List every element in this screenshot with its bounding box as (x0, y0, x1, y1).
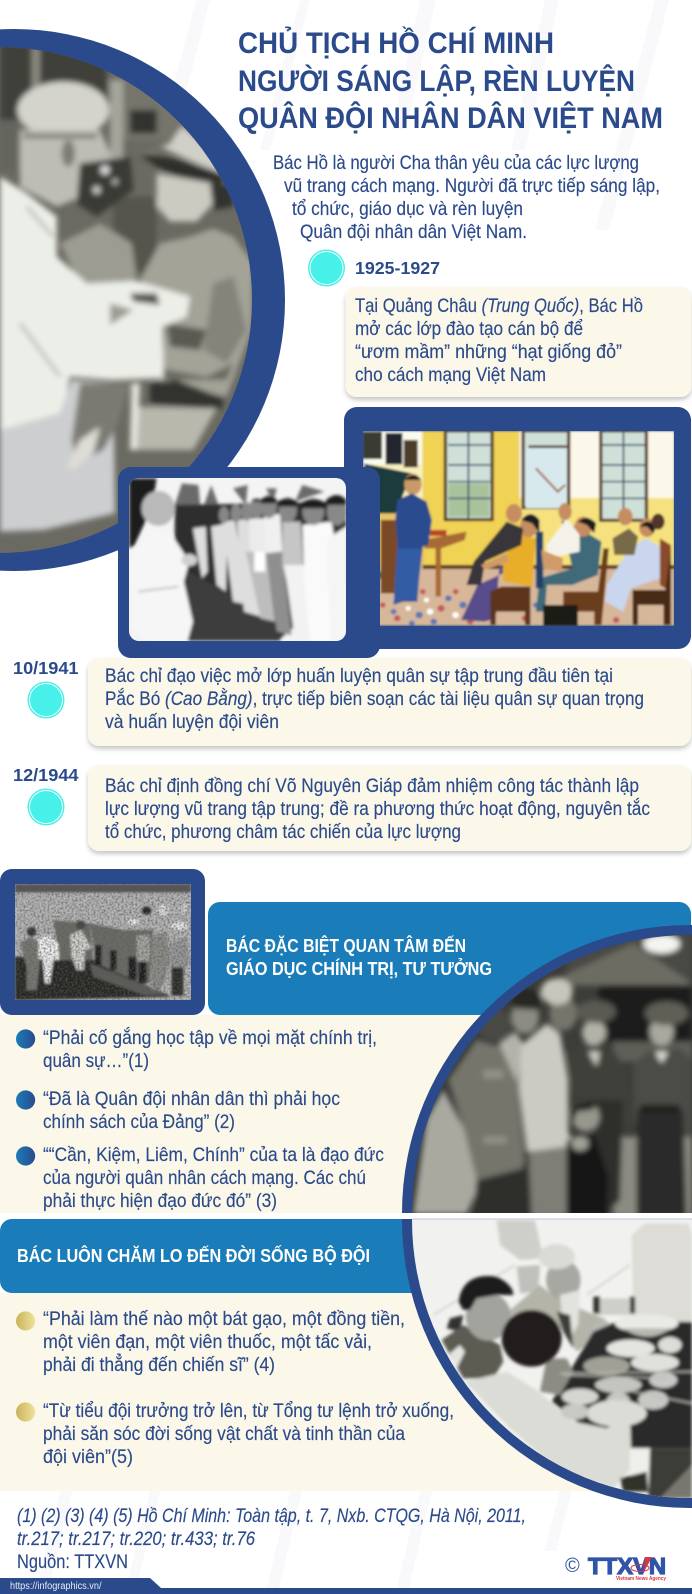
card: 1925-1927: Tại Quảng Châu (Trung Quốc), Bác Hồ (355, 295, 643, 317)
card: 10/1941: Bác chỉ đạo việc mở lớp huấn luyện quân sự tập trung đầu tiên tại (105, 665, 613, 687)
bullet list: political education: phải thực hiện đạo đức đó” (3) (43, 1190, 277, 1212)
bottom bar with url tab: https://infographics.vn/ (10, 1581, 102, 1592)
header: political education: BÁC ĐẶC BIỆT QUAN TÂM ĐẾN (226, 935, 466, 956)
card: 12/1944: Bác chỉ định đồng chí Võ Nguyên Giáp đảm nhiệm công tác thành lập (105, 775, 639, 797)
bullet list: soldiers' life: “Phải làm thế nào một bát gạo, một đồng tiền, (43, 1308, 405, 1330)
bullet list: political education: chính sách của Đảng” (2) (43, 1111, 235, 1133)
timeline marker 1925-1927: 1925-1927 (355, 258, 440, 278)
cream panel: soldiers' life (0, 1293, 692, 1491)
header: political education: GIÁO DỤC CHÍNH TRỊ, TƯ TƯỞNG (226, 958, 492, 979)
bullet list: soldiers' life: đội viên”(5) (43, 1446, 133, 1468)
footnotes and source: Nguồn: TTXVN (17, 1551, 128, 1573)
card: 1925-1927 (346, 287, 692, 397)
card: 1925-1927: cho cách mạng Việt Nam (355, 364, 546, 386)
intro text: Bác Hồ là người Cha thân yêu của các lực lượng (273, 152, 639, 174)
bullet list: soldiers' life: một viên đạn, một viên thuốc, một tấc vải, (43, 1331, 372, 1353)
intro text: tổ chức, giáo dục và rèn luyện (292, 198, 523, 220)
header: soldiers' life: BÁC LUÔN CHĂM LO ĐẾN ĐỜI SỐNG BỘ ĐỘI (17, 1245, 370, 1266)
timeline marker 1925-1927 (308, 250, 440, 286)
bottom bar with url tab (0, 1578, 692, 1594)
card: 12/1944: tổ chức, phương châm tác chiến của lực lượng (105, 821, 461, 843)
photo frame: crowd review (0, 869, 205, 1015)
title (238, 26, 663, 135)
intro text (273, 152, 660, 243)
bullet list: political education (16, 1026, 384, 1212)
photo frame: Bác Hồ with officers (118, 467, 380, 658)
bullet list: political education: “Phải cố gắng học tập về mọi mặt chính trị, (43, 1026, 377, 1049)
timeline marker 10/1941: 10/1941 (13, 658, 79, 678)
photo frame: painting of classroom (344, 407, 691, 649)
bullet list: political education: quân sự…”(1) (43, 1050, 149, 1072)
title: NGƯỜI SÁNG LẬP, RÈN LUYỆN (238, 64, 635, 98)
photo: Bác Hồ at dining table, in ring (400, 1219, 692, 1509)
card: 1925-1927: “ươm mầm” những “hạt giống đỏ” (355, 341, 622, 363)
bullet list: political education: “Đã là Quân đội nhân dân thì phải học (43, 1088, 340, 1110)
header: soldiers' life (0, 1219, 430, 1293)
bullet list: soldiers' life: “Từ tiểu đội trưởng trở lên, từ Tổng tư lệnh trở xuống, (43, 1400, 454, 1422)
logo: TTXVN: TTXVN (588, 1553, 666, 1579)
bullet list: soldiers' life: phải đi thẳng đến chiến sĩ” (4) (43, 1352, 275, 1376)
bullet list: political education: ““Cần, Kiệm, Liêm, Chính” của ta là đạo đức (43, 1144, 384, 1166)
card: 10/1941: Pắc Bó (Cao Bằng), trực tiếp biên soạn các tài liệu quân sự quan trọng (105, 687, 644, 710)
card: 12/1944 (88, 765, 691, 851)
footnotes and source: tr.217; tr.217; tr.220; tr.433; tr.76 (17, 1528, 255, 1550)
logo: TTXVN (565, 1553, 667, 1582)
header: political education (208, 902, 691, 1015)
cream panel: political education (0, 1015, 692, 1213)
card: 10/1941: và huấn luyện đội viên (105, 711, 279, 733)
bullet list: soldiers' life (16, 1308, 454, 1468)
card: 1925-1927: mở các lớp đào tạo cán bộ để (355, 318, 583, 340)
logo: TTXVN: Vietnam News Agency (616, 1576, 667, 1582)
bullet list: soldiers' life: phải săn sóc đời sống vật chất và tinh thần của (43, 1423, 405, 1445)
photo: Bác Hồ with soldiers and child, in ring (400, 925, 692, 1217)
photo: Bác Hồ pinning badge on soldier, in ring (0, 29, 285, 571)
card: 10/1941 (88, 658, 691, 746)
footnotes and source: (1) (2) (3) (4) (5) Hồ Chí Minh: Toàn tập, t. 7, Nxb. CTQG, Hà Nội, 2011, (17, 1505, 526, 1527)
logo: TTXVN: © (565, 1555, 580, 1577)
timeline marker 12/1944 (13, 765, 79, 826)
intro text: Quân đội nhân dân Việt Nam. (300, 221, 527, 243)
title: CHỦ TỊCH HỒ CHÍ MINH (238, 26, 554, 60)
bullet list: political education: của người quân nhân cách mạng. Các chú (43, 1167, 366, 1189)
timeline marker 12/1944: 12/1944 (13, 765, 79, 785)
footnotes and source (17, 1505, 526, 1573)
timeline marker 10/1941 (13, 658, 79, 718)
